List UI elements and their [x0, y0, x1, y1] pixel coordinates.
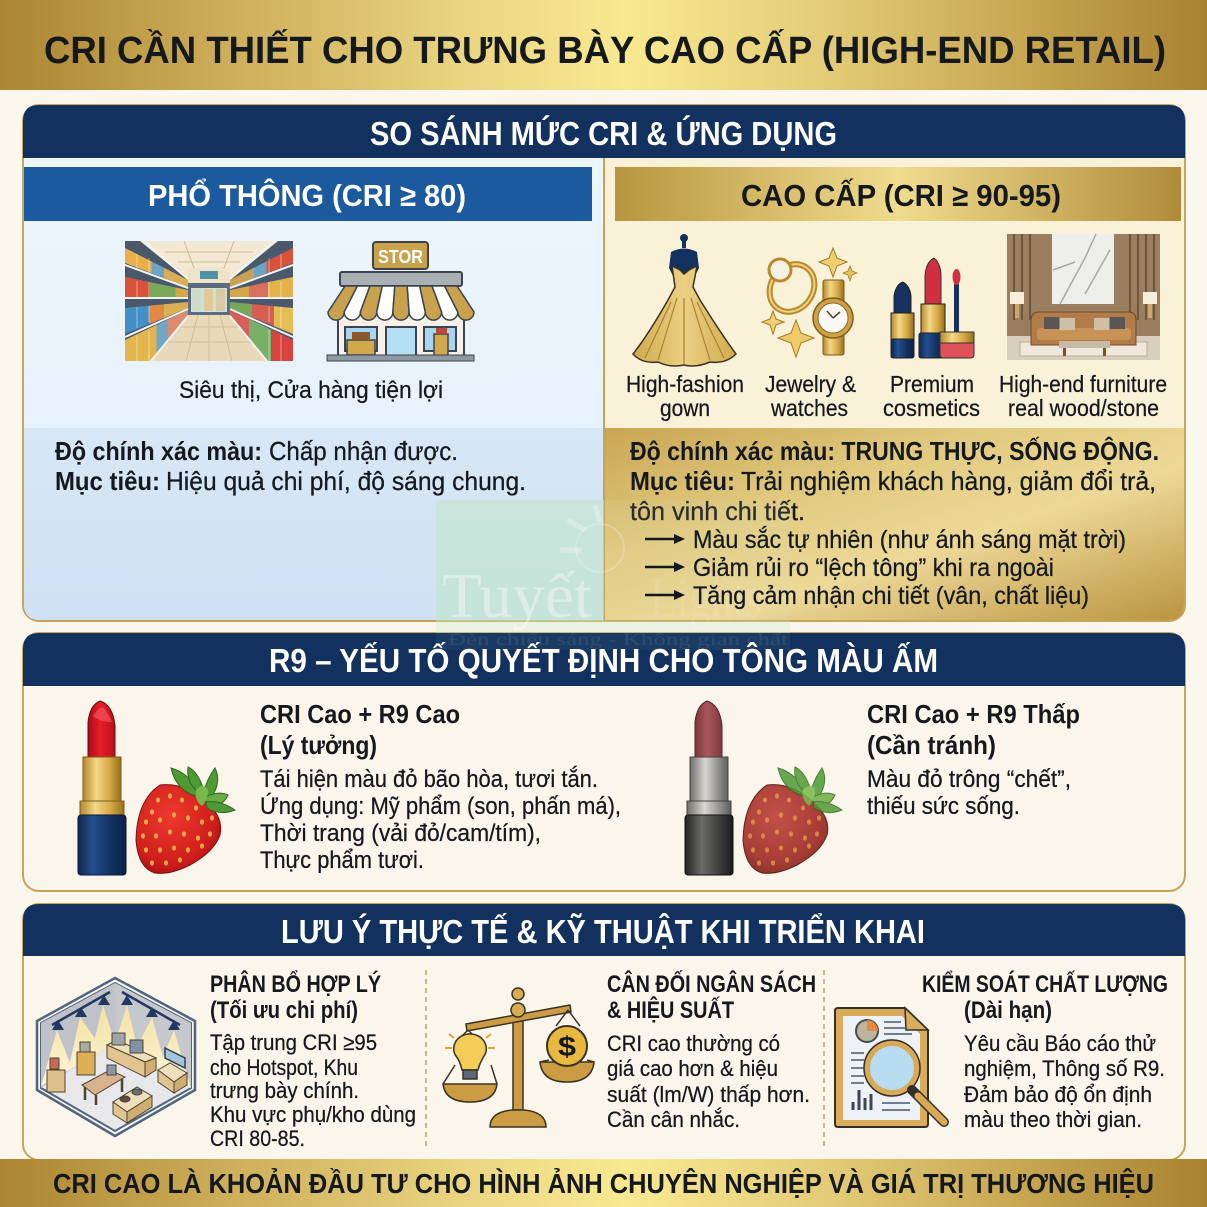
title banner — [0, 0, 1207, 90]
text: budget — [607, 970, 816, 1132]
text: budget: Cần cân nhắc. — [607, 1107, 740, 1132]
text: budget: CÂN ĐỐI NGÂN SÁCH — [607, 970, 816, 998]
text: allocation: PHÂN BỔ HỢP LÝ — [210, 970, 381, 998]
text: allocation: cho Hotspot, Khu — [210, 1055, 358, 1080]
dollar sign on coin: $ — [558, 1031, 576, 1062]
item labels: cosmetics — [883, 395, 980, 421]
icon: isometric showroom — [37, 978, 195, 1136]
icon: red lipstick — [78, 701, 126, 875]
column: standard CRI — [24, 158, 604, 620]
text: budget: & HIỆU SUẤT — [607, 996, 734, 1024]
icon: report and magnifier — [835, 1008, 944, 1127]
text: premium colour accuracy and goal: Trải nghiệm khách hàng, giảm đổi trả, — [741, 466, 1156, 496]
text: budget: CRI cao thường có — [607, 1031, 780, 1056]
icon: dull strawberry — [743, 767, 842, 873]
text: high R9: Thời trang (vải đỏ/cam/tím), — [260, 820, 541, 847]
text: allocation: Khu vực phụ/kho dùng — [210, 1102, 416, 1127]
icon: gown — [633, 234, 736, 366]
footer banner — [0, 1159, 1207, 1207]
text: high R9: Tái hiện màu đỏ bão hòa, tươi tắn. — [260, 766, 598, 793]
item labels: Jewelry & — [765, 371, 856, 397]
icon: luxury living room — [1007, 234, 1160, 360]
text: high R9 — [260, 699, 621, 874]
text: low R9: Màu đỏ trông “chết”, — [867, 766, 1071, 793]
item labels: Premium — [890, 371, 974, 397]
title banner: CRI CẦN THIẾT CHO TRƯNG BÀY CAO CẤP (HIGH-END RETAIL) — [44, 28, 1166, 72]
heading: standard — [24, 167, 592, 221]
text: budget: suất (lm/W) thấp hơn. — [607, 1082, 810, 1107]
panel: heading bar comparison — [23, 105, 1185, 158]
text: standard colour accuracy and goal: Độ chính xác màu: — [55, 436, 262, 466]
text: allocation: trưng bày chính. — [210, 1078, 359, 1103]
item labels: High-end furniture — [999, 371, 1167, 397]
watermark: Lights — [650, 565, 762, 630]
text: allocation: Tập trung CRI ≥95 — [210, 1030, 377, 1055]
text: high R9: Ứng dụng: Mỹ phẩm (son, phấn má), — [260, 793, 621, 820]
watermark: Đèn chiếu sáng - Không gian chất — [448, 630, 788, 649]
item labels: real wood/stone — [1008, 395, 1159, 421]
icon: dull lipstick — [685, 701, 733, 875]
caption: supermarket: Siêu thị, Cửa hàng tiện lợi — [179, 377, 443, 404]
item labels — [626, 371, 1167, 421]
text: high R9: Thực phẩm tươi. — [260, 847, 424, 874]
text: quality control: (Dài hạn) — [964, 997, 1052, 1024]
text: low R9: thiếu sức sống. — [867, 793, 1020, 820]
heading: premium — [615, 167, 1181, 221]
arrow list: premium benefits — [645, 525, 1126, 610]
icon: fresh strawberry — [136, 767, 235, 873]
panel: practical notes — [23, 904, 1185, 1160]
heading: standard: PHỔ THÔNG (CRI ≥ 80) — [148, 177, 466, 213]
text: allocation — [210, 970, 416, 1151]
R9 heading: R9 – YẾU TỐ QUYẾT ĐỊNH CHO TÔNG MÀU ẤM — [269, 641, 938, 679]
text: low R9: (Cần tránh) — [867, 730, 996, 760]
text: low R9: CRI Cao + R9 Thấp — [867, 699, 1080, 729]
text: standard colour accuracy and goal — [55, 436, 526, 496]
text: premium colour accuracy and goal — [630, 436, 1159, 526]
text: premium colour accuracy and goal: Mục tiêu: — [630, 466, 735, 496]
panel: R9 — [23, 633, 1185, 891]
icon: convenience store — [327, 242, 474, 361]
text: budget: giá cao hơn & hiệu — [607, 1056, 778, 1081]
text: quality control: màu theo thời gian. — [964, 1107, 1142, 1132]
text: premium colour accuracy and goal: tôn vinh chi tiết. — [630, 496, 805, 526]
text: quality control: Đảm bảo độ ổn định — [964, 1082, 1152, 1107]
icon: balance scale — [443, 988, 594, 1127]
panel frame — [23, 105, 1185, 621]
watermark — [436, 500, 790, 650]
text: allocation: CRI 80-85. — [210, 1126, 305, 1151]
text: quality control: nghiệm, Thông số R9. — [964, 1056, 1165, 1081]
arrow list: premium benefits: Màu sắc tự nhiên (như ánh sáng mặt trời) — [693, 525, 1126, 554]
notes heading: LƯU Ý THỰC TẾ & KỸ THUẬT KHI TRIỂN KHAI — [281, 913, 925, 950]
notes heading — [23, 904, 1185, 956]
icon: supermarket aisle — [125, 241, 293, 361]
panel: CRI comparison — [23, 105, 1185, 621]
arrow list: premium benefits: Giảm rủi ro “lệch tông” khi ra ngoài — [693, 554, 1054, 582]
text: high R9: (Lý tưởng) — [260, 730, 377, 760]
text: standard colour accuracy and goal: Mục tiêu: — [55, 466, 160, 496]
text: standard colour accuracy and goal: Chấp nhận được. — [269, 436, 458, 466]
heading: premium: CAO CẤP (CRI ≥ 90-95) — [741, 178, 1061, 213]
text: quality control: Yêu cầu Báo cáo thử — [964, 1031, 1156, 1056]
R9 frame — [23, 633, 1185, 891]
text: high R9: CRI Cao + R9 Cao — [260, 699, 460, 729]
column: premium CRI — [604, 158, 1184, 620]
notes frame — [23, 904, 1185, 1160]
arrow list: premium benefits: Tăng cảm nhận chi tiết (vân, chất liệu) — [693, 582, 1089, 610]
icon: cosmetics — [891, 258, 974, 358]
panel: heading bar comparison: SO SÁNH MỨC CRI & ỨNG DỤNG — [370, 115, 837, 152]
text: low R9 — [867, 699, 1080, 820]
item labels: gown — [660, 395, 710, 421]
watermark: Tuyết — [442, 560, 592, 631]
item labels: watches — [770, 395, 848, 421]
text: quality control — [922, 970, 1168, 1132]
text: standard colour accuracy and goal: Hiệu quả chi phí, độ sáng chung. — [166, 466, 526, 496]
icon: convenience store: STOR — [378, 247, 423, 267]
icon: jewelry and watch — [760, 248, 857, 357]
text: allocation: (Tối ưu chi phí) — [210, 997, 358, 1024]
item labels: High-fashion — [626, 371, 744, 397]
R9 heading — [23, 633, 1185, 686]
